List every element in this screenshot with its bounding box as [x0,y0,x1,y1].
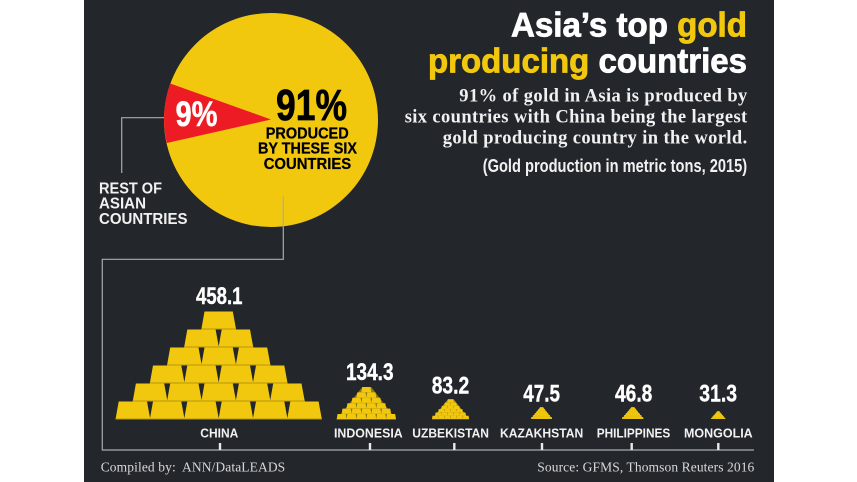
Uzbekistan: label: UZBEKISTAN [412,425,489,440]
footer: compiled by: Compiled by: ANN/DataLEADS [101,460,285,474]
label: produced by these six countries: PRODUCED [266,125,349,142]
axis ticks [220,443,718,450]
Indonesia: gold bar pyramid [337,387,396,419]
Mongolia: value: 31.3 [699,381,737,408]
note: units: (Gold production in metric tons, 2015) [483,156,747,176]
Uzbekistan: gold bar pyramid [432,399,469,419]
label: produced by these six countries: BY THESE SIX [258,140,358,158]
description text: gold producing country in the world. [443,128,747,148]
Philippines: gold bar pyramid [622,407,643,419]
connector: six countries frame [102,196,754,450]
connector: rest of Asia [122,118,164,173]
Kazakhstan: gold bar pyramid [531,407,552,419]
description text [405,87,748,148]
description text: six countries with China being the largest [405,108,748,128]
Philippines: value: 46.8 [615,381,652,408]
label: rest of Asian countries: ASIAN [99,196,146,212]
Indonesia: value: 134.3 [346,359,394,386]
label: 9%: 9% [176,95,218,134]
pie chart [164,13,378,227]
label: rest of Asian countries: REST OF [99,180,162,197]
Philippines: label: PHILIPPINES [597,425,671,440]
label: produced by these six countries [258,125,358,173]
label: rest of Asian countries [99,180,188,228]
Indonesia: label: INDONESIA [334,425,403,440]
title: Asia’s top gold [511,7,747,45]
China: label: CHINA [200,425,239,440]
Mongolia: label: MONGOLIA [684,425,753,440]
pie: 9% slice [164,84,271,143]
label: rest of Asian countries: COUNTRIES [99,211,188,228]
label: 91%: 91% [276,81,347,130]
description text: 91% of gold in Asia is produced by [459,87,748,107]
title: producing countries [428,43,747,81]
title [428,7,747,81]
Mongolia: gold bar pyramid [711,411,725,419]
pie: 91% slice [164,13,378,227]
Kazakhstan: value: 47.5 [523,381,560,408]
footer: source: Source: GFMS, Thomson Reuters 2016 [537,460,755,474]
China: gold bar pyramid [116,312,322,420]
China: value: 458.1 [196,283,242,310]
label: produced by these six countries: COUNTRIES [264,156,351,173]
Uzbekistan: value: 83.2 [432,372,469,399]
Kazakhstan: label: KAZAKHSTAN [500,425,583,440]
